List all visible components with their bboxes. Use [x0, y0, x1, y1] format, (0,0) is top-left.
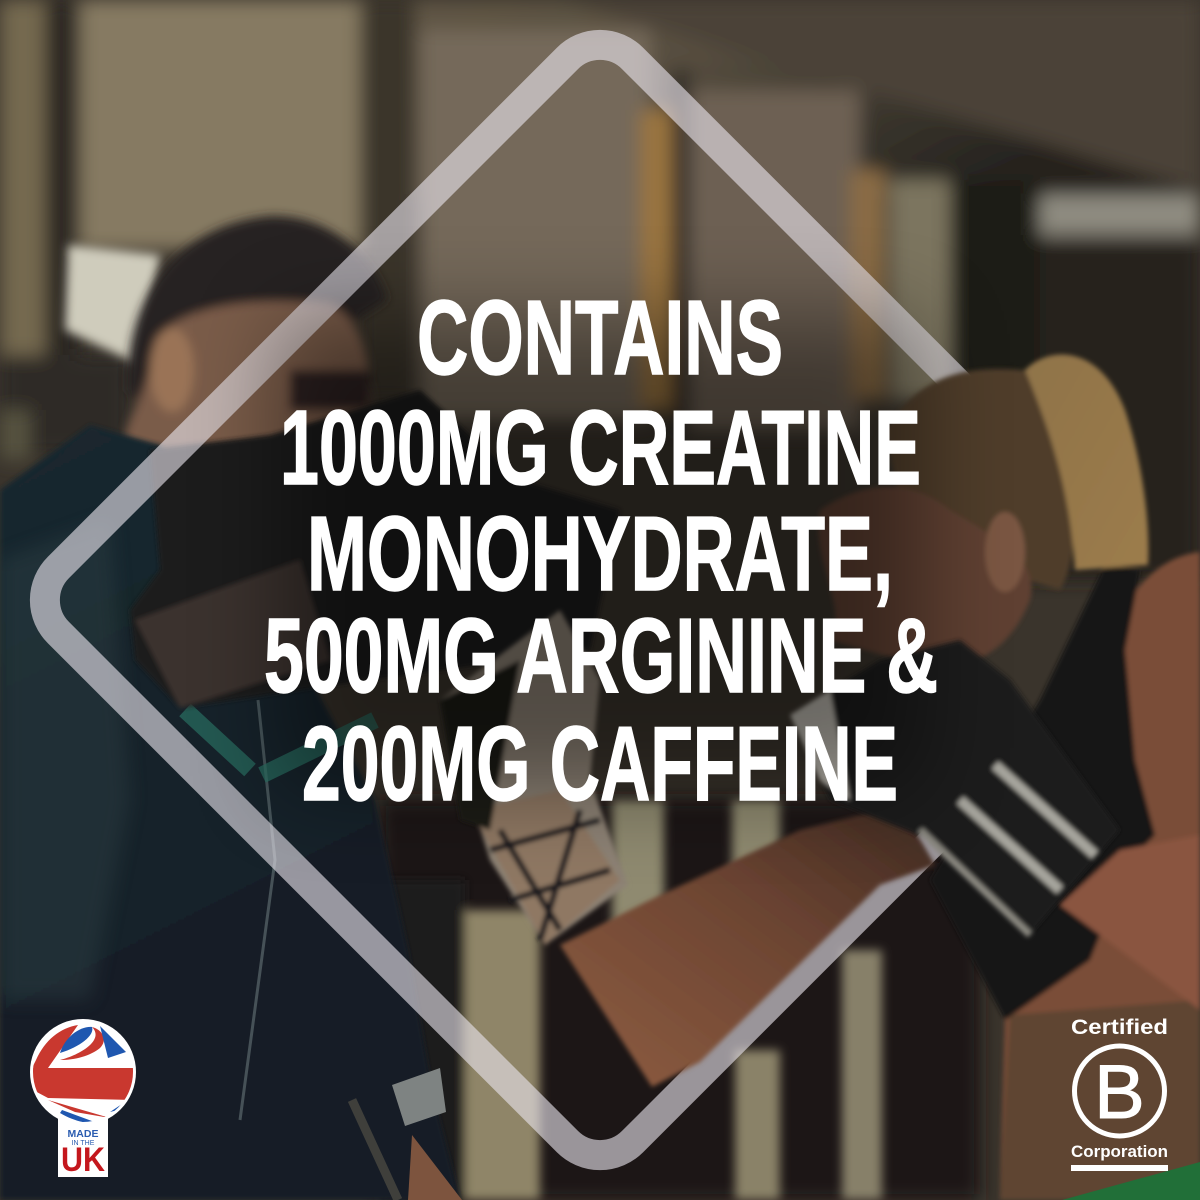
green shorts — [1062, 1162, 1200, 1200]
headline: MONOHYDRATE, — [307, 495, 893, 613]
badge: made in the UK: IN THE — [72, 1140, 95, 1147]
boxing glove — [790, 640, 1120, 935]
headline — [264, 279, 938, 823]
headline: CONTAINS — [417, 279, 783, 397]
man: coach with jacket — [0, 216, 462, 1200]
badge: certified B corporation: Certified — [1071, 1016, 1168, 1039]
translucent diamond outline — [30, 30, 970, 1170]
badge: certified B corporation: Corporation — [1071, 1143, 1168, 1161]
woman: boxer — [440, 355, 1200, 1200]
badge: made in the UK: MADE — [68, 1128, 98, 1140]
badge: certified B corporation: B — [1094, 1050, 1145, 1135]
dark shade behind headline — [280, 320, 920, 790]
badge: certified B corporation — [1071, 1016, 1168, 1171]
focus pad — [130, 390, 620, 708]
badge: made in the UK: UK — [61, 1141, 105, 1179]
badge: made in the UK — [30, 1019, 136, 1179]
headline: 200MG CAFFEINE — [302, 705, 898, 823]
wrapped wrist and glove — [440, 610, 628, 945]
